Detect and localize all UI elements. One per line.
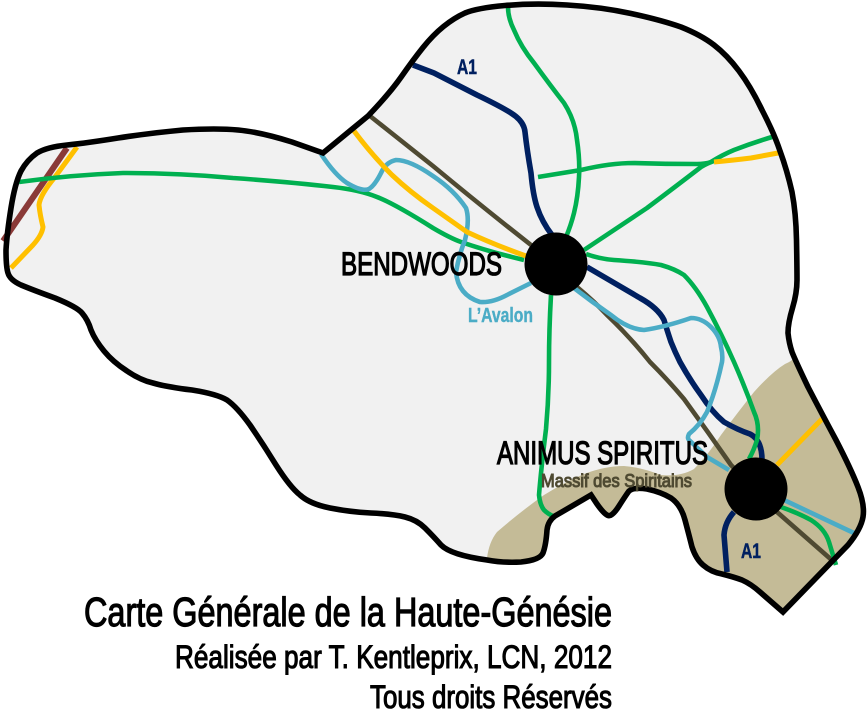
road: green west to Bendwoods — [19, 173, 524, 260]
label: Massif des Spiritains: Massif des Spiritains — [541, 471, 692, 491]
road: yellow east branch — [714, 153, 778, 162]
label: A1 north: A1 — [457, 56, 477, 79]
road: yellow western branch — [11, 147, 77, 268]
rights line: Tous droits Réservés — [370, 679, 612, 715]
road: green diagonal north-east — [584, 161, 714, 250]
motorway A1: north section — [413, 65, 552, 235]
road: green horizontal east — [538, 137, 772, 177]
road: green north to Bendwoods — [508, 7, 579, 237]
river: L'Avalon west section — [321, 154, 531, 302]
road: green Bendwoods south — [539, 295, 553, 516]
railway: olive line north-west to Bendwoods — [370, 116, 531, 245]
label: L'Avalon: L’Avalon — [468, 305, 533, 327]
credit line: Réalisée par T. Kentleprix, LCN, 2012 — [175, 639, 612, 675]
label: A1 south: A1 — [741, 540, 761, 563]
railway: western border line — [3, 148, 67, 241]
label: Bendwoods: BENDWOODS — [341, 246, 502, 282]
city marker: Animus Spiritus — [724, 458, 788, 520]
road: green south-east — [781, 507, 836, 565]
road: yellow Bendwoods north-west — [354, 131, 526, 256]
city marker: Bendwoods — [524, 232, 588, 296]
river: L'Avalon south-east section — [784, 500, 856, 534]
road: green Bendwoods to Animus Spiritus — [586, 254, 758, 459]
river: L'Avalon central section — [574, 288, 729, 470]
motorway A1: Bendwoods to Animus Spiritus — [587, 267, 762, 460]
railway: olive line Bendwoods to Animus Spiritus and beyond — [577, 287, 834, 562]
road: yellow Animus Spiritus north-east — [777, 419, 822, 465]
massif des Spiritains area — [487, 358, 863, 612]
motorway A1: south section — [724, 512, 734, 572]
label: Animus Spiritus: ANIMUS SPIRITUS — [497, 435, 708, 471]
title: Carte Générale de la Haute-Génésie — [84, 589, 612, 635]
